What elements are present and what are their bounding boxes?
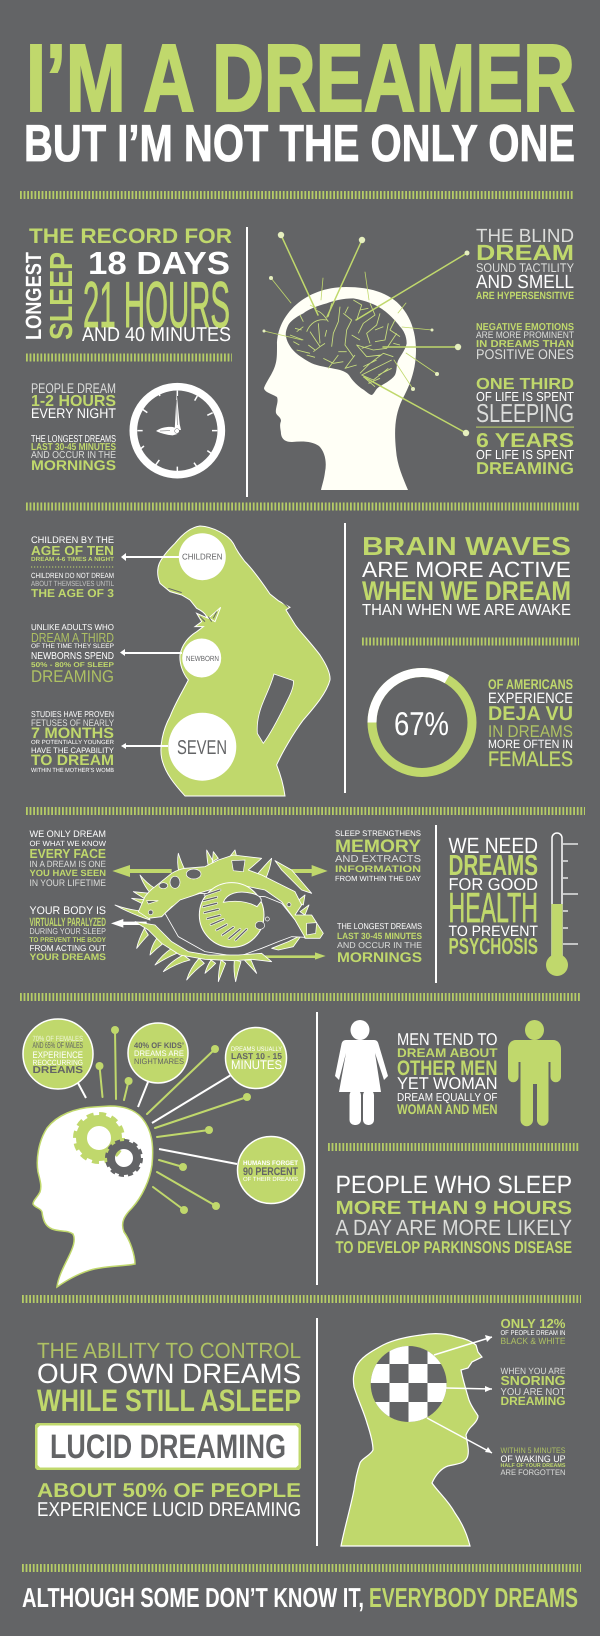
text block: longest dreams	[337, 921, 422, 965]
text block: men and women	[397, 1030, 498, 1117]
text block: snoring: WHEN YOU ARE	[500, 1366, 566, 1376]
bubble: reoccurring dreams: REOCCURRING	[32, 1058, 83, 1067]
text block: snoring: SNORING	[500, 1373, 566, 1388]
title	[24, 25, 575, 173]
text: 21 HOURS	[83, 268, 230, 341]
chart: 67 percent ring: 67%	[394, 705, 449, 742]
text block: paralyzed body: FROM ACTING OUT	[30, 943, 106, 953]
bubble: reoccurring dreams	[23, 1019, 93, 1089]
text block: waking up: HALF OF YOUR DREAMS	[500, 1463, 566, 1469]
text block: fetuses: STUDIES HAVE PROVEN	[31, 709, 114, 719]
text block: memory: SLEEP STRENGTHENS	[335, 829, 421, 838]
illustration: pregnant woman	[158, 526, 330, 796]
text block: longest dreams: THE LONGEST DREAMS	[337, 921, 422, 931]
text block: black and white: OF PEOPLE DREAM IN	[500, 1330, 566, 1337]
text block: deja vu: OF AMERICANS	[488, 676, 573, 692]
text block: parkinsons	[336, 1171, 572, 1257]
illustration: eye with arrows	[111, 850, 328, 982]
circle: seven	[168, 713, 236, 781]
bubble: reoccurring dreams: 70% OF FEMALES	[32, 1034, 83, 1043]
radiating lines	[264, 235, 467, 433]
text block: every face: EVERY FACE	[30, 846, 106, 861]
text block: negative emotions: POSITIVE ONES	[476, 346, 574, 362]
text block: children: AGE OF TEN	[31, 543, 114, 558]
footer statement: ALTHOUGH SOME DON’T KNOW IT,	[22, 1582, 364, 1613]
text block: black and white: ONLY 12%	[500, 1316, 566, 1331]
text block: waking up: WITHIN 5 MINUTES	[500, 1446, 566, 1455]
text block: every face: IN YOUR LIFETIME	[30, 878, 106, 889]
text block: paralyzed body: YOUR BODY IS	[30, 905, 106, 917]
text block: blind dreamers: THE BLIND	[476, 226, 574, 247]
text block: men and women: DREAM EQUALLY OF	[397, 1092, 498, 1104]
text block: dream duration: THE LONGEST DREAMS	[31, 434, 116, 445]
text block: men and women: MEN TEND TO	[397, 1030, 498, 1049]
text block: paralyzed body: TO PREVENT THE BODY	[30, 937, 106, 944]
text block: negative emotions: NEGATIVE EMOTIONS	[476, 322, 574, 333]
text block: every face: YOU HAVE SEEN	[30, 868, 106, 878]
panel: longest sleep record: LONGEST	[21, 252, 46, 340]
bubble: nightmares	[128, 1023, 188, 1083]
text block: men and women: OTHER MEN	[397, 1057, 498, 1080]
text block: blind dreamers: ARE HYPERSENSITIVE	[476, 290, 574, 302]
text block: paralyzed body: YOUR DREAMS	[30, 952, 106, 963]
text block: waking up	[500, 1446, 566, 1477]
bubble: humans forget: HUMANS FORGET	[243, 1160, 298, 1167]
bubble: humans forget: OF THEIR DREAMS	[243, 1176, 298, 1183]
text block: brain waves	[362, 531, 571, 619]
eye gaps	[147, 860, 317, 935]
text block: every face: OF WHAT WE KNOW	[30, 839, 107, 848]
checkerboard	[370, 1345, 448, 1423]
text block: one third of life: OF LIFE IS SPENT	[476, 389, 574, 404]
text block: dream duration: PEOPLE DREAM	[31, 380, 116, 396]
icon: man figure	[508, 1020, 561, 1126]
text block: fetuses: TO DREAM	[31, 752, 114, 769]
arrows: eye callouts	[111, 865, 328, 960]
illustration: head with brain	[262, 232, 470, 490]
text block: men and women: DREAM ABOUT	[397, 1046, 498, 1060]
eye lashes	[115, 850, 312, 982]
text block: longest dreams: MORNINGS	[337, 949, 422, 965]
panel: longest sleep record: SLEEP	[43, 252, 79, 340]
text block: paralyzed body: VIRTUALLY PARALYZED	[30, 915, 106, 929]
text block: we need dreams: WE NEED	[448, 833, 538, 858]
bubble: reoccurring dreams: EXPERIENCE	[32, 1050, 83, 1061]
text block: dream duration: AND OCCUR IN THE	[31, 450, 116, 461]
box: lucid dreaming: LUCID DREAMING	[50, 1428, 286, 1466]
text block: children: THE AGE OF 3	[31, 588, 114, 600]
bubble: reoccurring dreams: DREAMS	[32, 1065, 83, 1076]
text block: every face: WE ONLY DREAM	[30, 829, 106, 840]
text block: deja vu: DEJA VU	[488, 703, 573, 725]
text block: newborns: DREAMING	[31, 667, 114, 686]
text block: one third of life: OF LIFE IS SPENT	[476, 447, 574, 462]
circle: children	[179, 533, 226, 580]
bubble: dream length: LAST 10 - 15	[231, 1051, 282, 1061]
panel: longest sleep record	[21, 225, 232, 346]
text block: memory: FROM WITHIN THE DAY	[335, 874, 421, 883]
text block: ability to control	[37, 1338, 301, 1418]
bubble: humans forget: 90 PERCENT	[243, 1166, 298, 1178]
icon: gray gear	[107, 1141, 141, 1175]
text block: black and white	[500, 1316, 566, 1346]
text block: snoring: DREAMING	[500, 1394, 566, 1408]
text block: dream duration: EVERY NIGHT	[31, 405, 116, 421]
text block: parkinsons: MORE THAN 9 HOURS	[336, 1198, 572, 1219]
circle: seven: SEVEN	[177, 737, 227, 759]
bubble: dream length: MINUTES	[231, 1058, 282, 1072]
illustration: profile head with checkerboard	[341, 1334, 482, 1546]
text block: about 50 percent: ABOUT 50% OF PEOPLE	[37, 1480, 301, 1502]
text block: one third of life: DREAMING	[476, 459, 574, 478]
bubble: humans forget	[238, 1136, 304, 1204]
text block: deja vu: EXPERIENCE	[488, 690, 573, 707]
text block: newborns	[31, 622, 114, 686]
text block: men and women: WOMAN AND MEN	[397, 1101, 498, 1117]
text block: children: ABOUT THEMSELVES UNTIL	[31, 579, 114, 588]
panel: longest sleep record: 18 DAYS	[88, 245, 230, 281]
text block: ability to control: THE ABILITY TO CONTROL	[37, 1338, 301, 1363]
icon: woman figure	[335, 1020, 388, 1125]
text block: fetuses: HAVE THE CAPABILITY	[31, 746, 115, 755]
text block: negative emotions: ARE MORE PROMINENT	[476, 330, 574, 341]
text block: parkinsons: PEOPLE WHO SLEEP	[336, 1171, 572, 1199]
text block: newborns: OF THE TIME THEY SLEEP	[31, 643, 114, 650]
text block: longest dreams: AND OCCUR IN THE	[337, 940, 422, 950]
iris	[199, 883, 264, 947]
text block: paralyzed body: DURING YOUR SLEEP	[30, 926, 106, 936]
text block: snoring	[500, 1366, 566, 1408]
text block: brain waves: THAN WHEN WE ARE AWAKE	[362, 602, 571, 619]
text block: one third of life: 6 YEARS	[476, 430, 574, 452]
text block: blind dreamers: DREAM	[476, 240, 574, 265]
text block: brain waves: WHEN WE DREAM	[362, 576, 571, 606]
text block: one third of life	[476, 376, 574, 478]
text block: blind dreamers	[476, 226, 575, 302]
text block: children: CHILDREN BY THE	[31, 535, 114, 546]
circle: children: CHILDREN	[182, 552, 222, 562]
text block: we need dreams: PSYCHOSIS	[448, 933, 538, 959]
bubble: dream length	[226, 1028, 286, 1088]
text block: children	[31, 535, 114, 600]
text block: newborns: NEWBORNS SPEND	[31, 651, 114, 662]
text block: children: CHILDREN DO NOT DREAM	[31, 571, 114, 580]
text block: black and white: BLACK & WHITE	[500, 1336, 566, 1346]
text block: we need dreams	[448, 833, 538, 959]
text block: waking up: ARE FORGOTTEN	[500, 1468, 566, 1477]
text block: longest dreams: LAST 30-45 MINUTES	[337, 931, 422, 941]
circle: newborn	[182, 638, 221, 678]
text block: children: DREAM 4-6 TIMES A NIGHT	[31, 556, 114, 563]
text block: blind dreamers: AND SMELL	[476, 272, 574, 293]
text block: snoring: YOU ARE NOT	[500, 1387, 566, 1398]
text block: parkinsons: A DAY ARE MORE LIKELY	[336, 1215, 572, 1240]
text block: one third of life: ONE THIRD	[476, 376, 574, 393]
circle: newborn: NEWBORN	[186, 654, 219, 663]
text block: we need dreams: DREAMS	[448, 850, 538, 882]
text block: deja vu	[488, 676, 573, 771]
bubble: dream length: DREAMS USUALLY	[231, 1046, 283, 1053]
text block: memory: AND EXTRACTS	[335, 854, 421, 865]
text block: memory	[335, 829, 421, 883]
text block: newborns: UNLIKE ADULTS WHO	[31, 622, 114, 632]
text block: ability to control: WHILE STILL ASLEEP	[37, 1383, 301, 1418]
text block: dream duration	[31, 380, 116, 473]
upper eyelid	[138, 855, 323, 938]
brain	[286, 298, 407, 395]
icon: thermometer	[546, 833, 578, 976]
text block: memory: MEMORY	[335, 836, 421, 856]
bubble: nightmares: NIGHTMARES	[134, 1057, 184, 1066]
text block: deja vu: IN DREAMS	[488, 722, 573, 741]
text block: we need dreams: FOR GOOD	[448, 875, 538, 894]
illustration: child head with gears	[33, 1106, 153, 1287]
text block: waking up: OF WAKING UP	[500, 1454, 566, 1465]
text block: dream duration: 1-2 HOURS	[31, 393, 116, 410]
text block: brain waves: ARE MORE ACTIVE	[362, 557, 571, 582]
text block: we need dreams: TO PREVENT	[448, 923, 538, 940]
text block: negative emotions	[476, 322, 574, 362]
arrows: profile callouts	[427, 1335, 492, 1453]
text block: paralyzed body	[30, 905, 106, 963]
text block: every face: IN A DREAM IS ONE	[30, 859, 106, 869]
lower eyelid	[135, 922, 272, 962]
box: lucid dreaming	[35, 1423, 301, 1470]
text block: newborns: DREAM A THIRD	[31, 630, 114, 645]
text block: fetuses: 7 MONTHS	[31, 725, 114, 742]
text block: ability to control: OUR OWN DREAMS	[37, 1358, 301, 1389]
text block: newborns: 50% - 80% OF SLEEP	[31, 662, 114, 669]
text block: dream duration: LAST 30-45 MINUTES	[31, 442, 116, 453]
text block: blind dreamers: SOUND TACTILITY	[476, 261, 575, 275]
bubble: nightmares: DREAMS ARE	[134, 1049, 184, 1058]
text block: deja vu: FEMALES	[488, 748, 573, 771]
panel: longest sleep record: AND 40 MINUTES	[82, 324, 231, 346]
radiating lines and dots	[78, 1026, 251, 1214]
eye socket	[165, 893, 305, 957]
text block: about 50 percent	[37, 1480, 301, 1521]
icon: clock	[133, 387, 221, 475]
panel: longest sleep record: THE RECORD FOR	[29, 225, 232, 248]
chart: 67 percent ring	[372, 672, 472, 772]
text block: deja vu: MORE OFTEN IN	[488, 737, 573, 751]
text block: dream duration: MORNINGS	[31, 457, 116, 473]
arrows: woman callouts	[120, 553, 182, 749]
text block: fetuses	[31, 709, 115, 774]
text block: every face	[30, 829, 107, 889]
icon: green gear	[75, 1114, 123, 1162]
text block: about 50 percent: EXPERIENCE LUCID DREAMING	[37, 1499, 301, 1521]
text block: fetuses: FETUSES OF NEARLY	[31, 718, 115, 729]
text block: fetuses: OR POTENTIALLY YOUNGER	[31, 739, 115, 746]
text block: memory: INFORMATION	[335, 864, 421, 875]
text block: brain waves: BRAIN WAVES	[362, 531, 571, 561]
text block: fetuses: WITHIN THE MOTHER’S WOMB	[31, 767, 114, 774]
bubble: nightmares: 40% OF KIDS’	[134, 1041, 184, 1050]
text block: negative emotions: IN DREAMS THAN	[476, 339, 574, 350]
bubble: reoccurring dreams: AND 65% OF MALES	[32, 1040, 83, 1050]
text block: men and women: YET WOMAN	[397, 1074, 498, 1093]
